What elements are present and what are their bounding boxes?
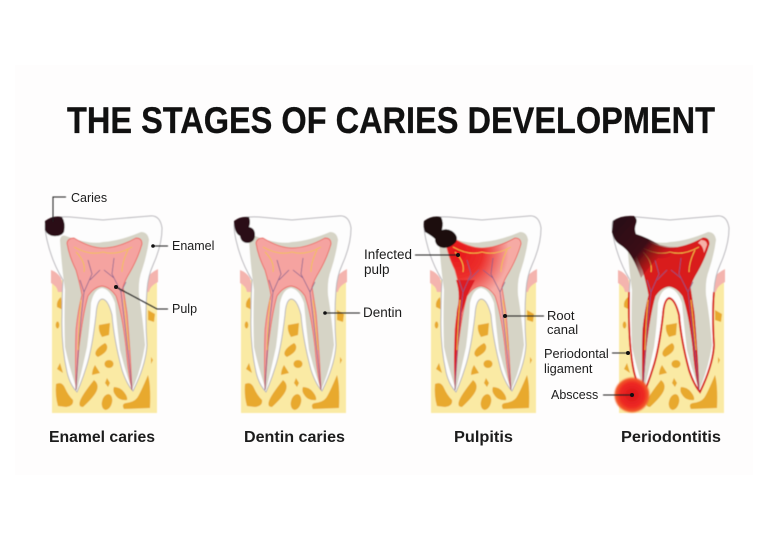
stage captions: Dentin caries bbox=[244, 429, 345, 446]
part labels: Abscess bbox=[551, 388, 598, 402]
infected pulp leader bbox=[415, 254, 458, 256]
caries cavity bbox=[424, 216, 457, 248]
leader dots bbox=[114, 244, 634, 397]
pulp leader bbox=[116, 287, 168, 309]
part labels: pulp bbox=[364, 262, 390, 277]
decay bbox=[612, 216, 684, 278]
part labels: canal bbox=[547, 322, 578, 337]
part labels: Root bbox=[547, 308, 575, 323]
caries spot bbox=[45, 216, 65, 236]
pale horn of pulp bbox=[698, 240, 707, 253]
tooth 1: enamel caries bbox=[45, 216, 162, 413]
stage captions: Pulpitis bbox=[454, 429, 513, 446]
enamel leader bbox=[153, 245, 168, 247]
abscess leader bbox=[603, 394, 632, 396]
part labels: Enamel bbox=[172, 239, 214, 253]
tooth 3: pulpitis bbox=[424, 216, 541, 413]
part labels: Periodontal bbox=[544, 346, 609, 361]
part labels: Dentin bbox=[363, 305, 402, 320]
part labels: ligament bbox=[544, 361, 593, 376]
stage captions: Periodontitis bbox=[621, 429, 721, 446]
root canal leader bbox=[505, 315, 544, 317]
periodontal ligament leader bbox=[612, 352, 628, 354]
tooth 2: dentin caries bbox=[234, 216, 351, 413]
inflamed left root canal bbox=[454, 280, 475, 390]
part labels bbox=[71, 191, 609, 402]
tooth 4: periodontitis bbox=[612, 216, 729, 413]
caries cavity bbox=[234, 217, 255, 243]
part labels: Caries bbox=[71, 191, 107, 205]
abscess bbox=[614, 378, 650, 412]
content backdrop bbox=[15, 65, 753, 475]
dentin leader bbox=[325, 312, 360, 314]
inflamed ligament bbox=[629, 292, 714, 393]
caries leader bbox=[53, 197, 66, 222]
part labels: Pulp bbox=[172, 302, 197, 316]
stage captions bbox=[49, 429, 721, 446]
stage captions: Enamel caries bbox=[49, 429, 155, 446]
part labels: Infected bbox=[364, 247, 412, 262]
